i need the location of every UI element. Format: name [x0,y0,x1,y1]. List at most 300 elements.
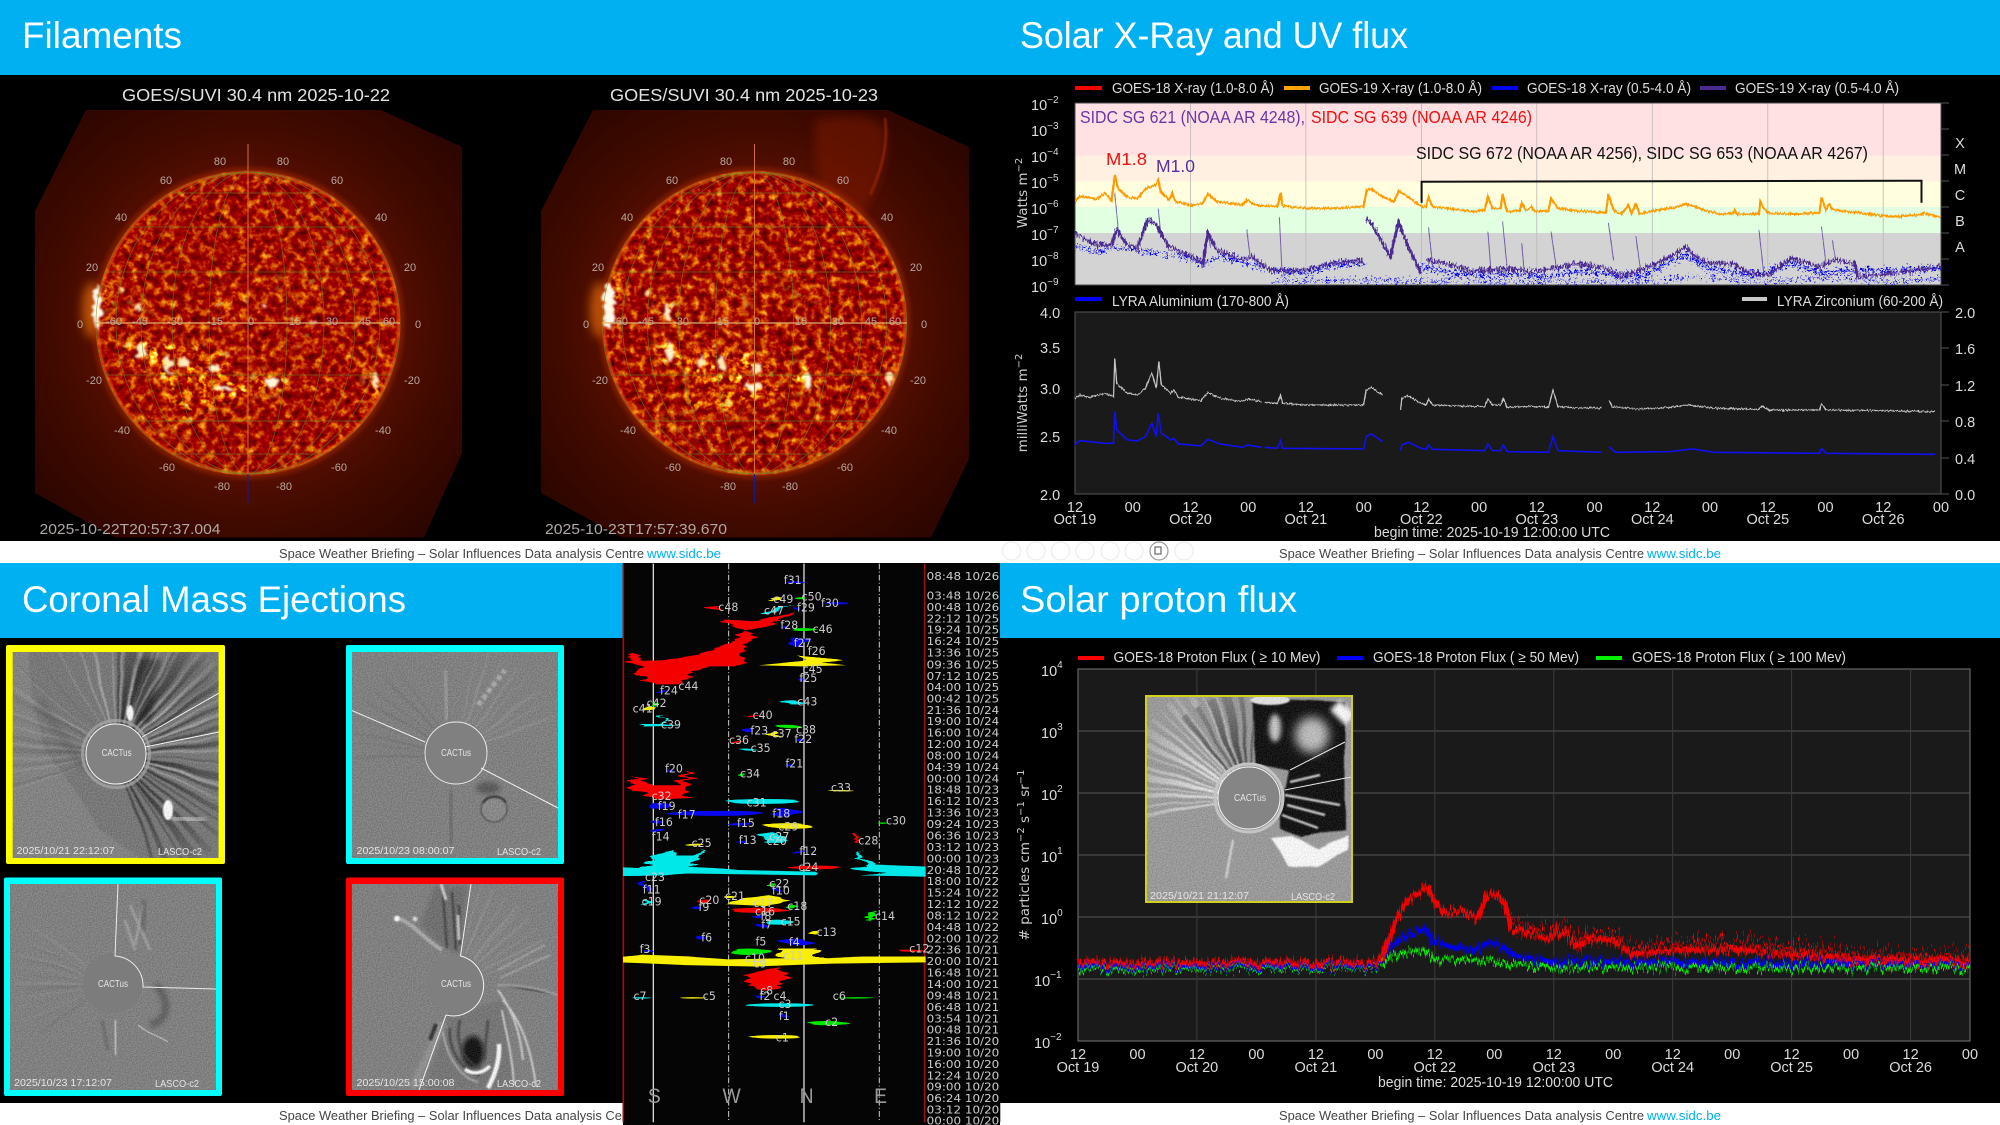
solar image: 2025-10-23: 20 [910,262,922,274]
detection labels: c48 [718,599,738,614]
solar image: 2025-10-23: -80 [720,481,736,493]
y-axis labels: proton: 10 [1041,726,1057,742]
solar image: 2025-10-23: -40 [620,425,636,437]
y-axis labels: proton: 4 [1057,660,1063,671]
solar image: 2025-10-23: 80 [783,156,795,168]
xray panel background [1000,0,2000,541]
solar image: 2025-10-23: 0 [921,319,927,331]
legend: LYRA zirconium: LYRA Zirconium (60-200 Å) [1777,293,1943,310]
y-axis labels: proton: 10 [1041,912,1057,928]
solar image: 2025-10-22: 60 [331,175,343,187]
footer: x-ray: www.sidc.be [1646,546,1721,561]
y-axis labels: LYRA right: 2.0 [1955,306,1975,322]
detection labels: f29 [797,600,815,615]
detection labels: c2 [825,1015,838,1029]
detection labels: f12 [799,844,817,858]
y-axis labels: proton: 10 [1041,788,1057,804]
detection labels: f16 [655,815,673,829]
time axis labels: 06:24 10/20 [927,1093,999,1105]
detection labels: f30 [821,596,839,610]
x-axis labels: LYRA: Oct 20 [1169,512,1212,528]
time axis labels: 06:48 10/21 [927,1002,999,1014]
annotation: M1.8: M1.8 [1106,149,1147,169]
y-axis labels: proton [1034,660,1063,1052]
y-axis labels: x-ray: −6 [1047,199,1059,210]
detection labels: c15 [781,914,801,929]
detection labels [633,572,929,1045]
x-axis labels: LYRA: 12 [1413,500,1429,516]
legend: x-ray: GOES-18 X-ray (0.5-4.0 Å) [1527,80,1691,97]
solar image: 2025-10-22: -40 [375,425,391,437]
detection labels: f13 [739,833,757,847]
x-axis labels: LYRA: Oct 21 [1285,512,1327,528]
y-axis labels: x-ray: 10 [1031,202,1047,218]
detection labels: c40 [753,708,773,722]
solar image: 2025-10-23: 60 [666,175,678,187]
x-axis labels: LYRA [1054,500,1949,541]
time axis labels: 09:24 10/23 [927,819,999,831]
footer: proton: Space Weather Briefing – Solar Influences Data analysis Centre [1279,1108,1644,1123]
detection labels: f22 [794,732,812,746]
CME image: yellow frame 2025/10/21 22:12: 2025/10/21 22:12:07 [17,845,115,857]
detection labels: c17 [753,896,773,910]
legend: x-ray: GOES-19 X-ray (0.5-4.0 Å) [1735,80,1899,97]
time axis labels: 12:12 10/22 [927,899,999,911]
x-axis labels: proton: 00 [1724,1047,1740,1063]
CME image: cyan frame 2025/10/23 17:12: LASCO-c2 [155,1078,199,1090]
solar image: 2025-10-22: 20 [404,262,416,274]
flare class letters [1954,136,1966,256]
y-axis labels: LYRA right [1955,306,1975,504]
y-axis labels: LYRA left: 4.0 [1040,306,1060,322]
y-axis labels: LYRA right: 1.6 [1955,342,1975,358]
solar image: 2025-10-23 [541,110,969,538]
x-axis labels: proton: 00 [1248,1047,1264,1063]
detection labels: f1 [779,1008,790,1023]
flare class letters: A [1955,240,1965,256]
detection labels: c14 [875,909,895,923]
x-axis labels: proton: 00 [1962,1047,1978,1063]
time axis labels: 16:48 10/21 [927,967,999,979]
detection labels: c13 [817,924,837,939]
footer: filaments: www.sidc.be [646,546,721,561]
detection labels: f26 [808,643,826,658]
time axis labels [927,571,1000,1125]
detection labels: c36 [729,733,749,747]
image title: 2025-10-22: GOES/SUVI 30.4 nm 2025-10-22 [122,85,390,105]
solar image: 2025-10-22: -15 [207,316,223,328]
detection labels: f8 [761,909,771,923]
detection labels: c6 [833,989,846,1003]
detection labels: c19 [642,894,662,909]
time axis labels: 13:36 10/23 [927,807,999,820]
x-axis labels: proton: Oct 23 [1532,1060,1575,1076]
x-axis labels: proton: 12 [1427,1047,1443,1063]
detection labels: f19 [658,799,676,813]
solar image: 2025-10-22: 80 [277,156,289,168]
time axis labels: 21:36 10/24 [927,705,1000,717]
solar image: 2025-10-22: 0 [415,319,421,331]
slideshow controls [1002,542,1193,560]
legend: x-ray [1075,80,1899,97]
detection labels: c39 [661,717,681,732]
inset: CME image 2025/10/21 21:12: 2025/10/21 21:12:07 [1150,890,1249,902]
time axis labels: 08:12 10/22 [927,910,999,923]
detection labels: c41 [633,701,653,716]
y-axis labels: LYRA left: 2.5 [1040,430,1060,446]
solar image: 2025-10-22: -60 [106,316,122,328]
CME image: yellow frame 2025/10/21 22:12: CACTus [102,747,132,759]
detection labels: f9 [699,900,709,914]
header: filaments [0,0,1000,75]
detection labels: f18 [772,806,790,820]
x-axis labels: proton: Oct 21 [1295,1060,1337,1076]
x-axis labels: LYRA: begin time: 2025-10-19 12:00:00 UTC [1374,525,1610,541]
CME image: cyan frame 2025/10/23 08:00: LASCO-c2 [497,846,541,858]
solar image: 2025-10-23: -40 [881,425,897,437]
detection labels: c7 [633,989,647,1003]
CME image: red frame 2025/10/25 15:00: CACTus [441,978,471,990]
flare class letters: X [1955,136,1965,152]
solar image: 2025-10-22: -60 [159,462,175,474]
y-axis labels: x-ray: −4 [1047,147,1059,158]
y-axis labels: LYRA left: 2.0 [1040,488,1060,504]
flare class letters: C [1955,188,1965,204]
annotation: SIDC SG 672: SIDC SG 672 (NOAA AR 4256), SIDC SG 653 (NOAA AR 4267) [1416,143,1868,163]
header: solar x-ray: Solar X-Ray and UV flux [1020,15,1408,56]
detection labels: f20 [665,761,683,775]
inset: CME image 2025/10/21 21:12 [1145,695,1353,903]
time axis labels: 09:48 10/21 [927,990,999,1002]
detection labels: c45 [803,662,823,676]
series: proton >=10 MeV [1078,887,1970,963]
footer: proton: www.sidc.be [1646,1108,1721,1123]
solar image: 2025-10-22: 40 [115,212,127,224]
detection labels: c49 [773,591,793,606]
detection labels: f10 [772,883,790,898]
series: proton >=50 MeV [1078,928,1970,966]
time axis labels: 22:12 10/25 [927,613,999,625]
y-axis labels: x-ray: −8 [1047,251,1059,262]
solar image: 2025-10-22: 0 [248,316,254,328]
detection labels: f24 [660,683,678,698]
y-axis labels: x-ray: −3 [1047,121,1059,132]
solar image: 2025-10-23: -60 [612,316,628,328]
solar image: 2025-10-23: 30 [832,316,844,328]
time axis labels: 06:36 10/23 [927,830,999,843]
x-axis labels: LYRA: 12 [1760,500,1776,516]
strip background [623,563,1000,1125]
solar image: 2025-10-23: 60 [889,316,901,328]
detection labels: c29 [778,819,798,834]
y-axis title: milliwatts: milliWatts m [1015,368,1031,452]
timestamp right: 2025-10-23T17:57:39.670 [545,521,727,538]
flare class letters: M [1954,162,1966,178]
CME image: red frame 2025/10/25 15:00 [346,878,564,1096]
solar image: 2025-10-22: 60 [160,175,172,187]
y-axis labels: x-ray: 10 [1031,254,1047,270]
inset: CME image 2025/10/21 21:12: CACTus [1234,792,1266,804]
y-axis title: particles: −2 [1016,827,1027,842]
detection labels: f23 [750,723,768,738]
time axis labels: 03:12 10/20 [927,1104,999,1117]
detection labels: f2 [760,989,770,1003]
detection labels: c30 [886,813,906,828]
panel: filaments [0,0,1000,541]
y-axis labels: proton: −1 [1050,970,1062,981]
legend: proton flux: GOES-18 Proton Flux ( ≥ 10 Mev) [1114,650,1320,666]
CME image: cyan frame 2025/10/23 17:12: CACTus [98,978,128,990]
annotation: M1.0: M1.0 [1156,156,1195,176]
detection labels: c3 [778,997,792,1011]
x-axis labels: LYRA: 00 [1587,500,1603,516]
header: filaments: Filaments [22,15,182,56]
y-axis labels: proton: −2 [1050,1032,1062,1043]
detection labels: f7 [761,917,772,932]
time axis labels: 16:00 10/24 [927,727,1000,740]
annotation: SIDC SG 639: SIDC SG 639 (NOAA AR 4246) [1311,107,1532,127]
x-axis labels: LYRA: Oct 22 [1400,512,1443,528]
x-axis labels: proton [1057,1047,1978,1091]
header: solar proton flux [1000,563,2000,638]
x-axis labels: proton: 12 [1070,1047,1086,1063]
CME image: yellow frame 2025/10/21 22:12: LASCO-c2 [158,846,202,858]
strip position lines [623,564,925,1122]
x-axis labels: LYRA: 12 [1875,500,1891,516]
compass labels: E [874,1085,887,1108]
detection labels: c22 [769,876,789,891]
detection labels: c4 [773,989,787,1003]
solar image: 2025-10-22 [35,110,462,538]
time axis labels: 08:00 10/24 [927,750,1000,763]
solar image: 2025-10-22: -80 [276,481,292,493]
x-axis labels: LYRA: 00 [1356,500,1372,516]
x-axis labels: proton: 00 [1486,1047,1502,1063]
solar image: 2025-10-23: -60 [837,462,853,474]
header: coronal mass ejections: Coronal Mass Ejections [22,579,406,620]
solar image: 2025-10-23: 15 [795,316,807,328]
time axis labels: 19:24 10/25 [927,624,999,637]
time axis background [926,564,1000,1122]
compass labels: W [723,1085,741,1108]
solar image: 2025-10-23: -80 [782,481,798,493]
footer: filaments: Space Weather Briefing – Solar Influences Data analysis Centre [279,546,644,561]
y-axis labels: x-ray: −9 [1047,277,1059,288]
y-axis labels: x-ray: 10 [1031,150,1047,166]
solar image: 2025-10-23: 45 [865,316,877,328]
time axis labels: 14:00 10/21 [927,978,999,991]
time axis labels: 16:12 10/23 [927,796,999,808]
y-axis labels: LYRA left [1040,306,1060,504]
detection labels: c42 [647,696,667,710]
series: GOES x-ray 0.5-4.0 [1075,175,1941,282]
solar image: 2025-10-22: 0 [77,319,83,331]
x-axis labels: LYRA: 00 [1471,500,1487,516]
x-axis labels: LYRA: 12 [1298,500,1314,516]
detection labels: c16 [755,904,775,918]
compass labels: S [648,1085,661,1108]
time axis labels: 00:48 10/26 [927,601,999,614]
x-axis labels: proton: Oct 22 [1413,1060,1456,1076]
solar image: 2025-10-23: -20 [592,375,608,387]
time axis labels: 04:39 10/24 [927,762,1000,774]
detection labels: c33 [831,780,851,795]
y-axis title: particles: −1 [1016,770,1027,784]
solar image: 2025-10-23: -30 [673,316,689,328]
compass labels: N [800,1085,814,1108]
solar image: 2025-10-23: 80 [720,156,732,168]
solar image: 2025-10-23: -20 [910,375,926,387]
x-axis labels: LYRA: Oct 24 [1631,512,1674,528]
detection labels: c21 [725,889,745,903]
chart: CACTus detection strip [610,563,1000,1125]
CME image: cyan frame 2025/10/23 08:00: CACTus [441,747,471,759]
panel: solar proton flux [1000,563,2000,1103]
legend: x-ray: GOES-19 X-ray (1.0-8.0 Å) [1319,80,1482,97]
y-axis labels: proton: 10 [1041,850,1057,866]
x-axis labels: proton: begin time: 2025-10-19 12:00:00 UTC [1378,1075,1613,1091]
solar image: 2025-10-22: 60 [383,316,395,328]
CME image: cyan frame 2025/10/23 08:00: 2025/10/23 08:00:07 [356,845,455,857]
time axis labels: 00:42 10/25 [927,693,999,705]
detection labels: c35 [751,741,771,755]
detection labels: c5 [703,989,716,1003]
CME image: cyan frame 2025/10/23 17:12: 2025/10/23 17:12:07 [14,1077,112,1089]
time axis labels: 18:48 10/23 [927,784,999,797]
x-axis labels: proton: 12 [1189,1047,1205,1063]
x-axis labels: LYRA: 00 [1817,500,1834,516]
time axis labels: 03:12 10/23 [927,842,999,854]
inset: CME image 2025/10/21 21:12: LASCO-c2 [1291,891,1335,903]
detection labels: c1 [776,1030,789,1045]
header: solar x-ray [1000,0,2000,75]
y-axis labels: proton: 10 [1041,664,1057,680]
x-axis labels: proton: Oct 25 [1770,1060,1813,1076]
solar image: 2025-10-23: 0 [754,316,760,328]
detection labels: f27 [794,635,812,650]
detection labels: f31 [784,572,802,587]
proton panel background [1000,563,2000,1103]
legend: x-ray: GOES-18 X-ray (1.0-8.0 Å) [1112,80,1274,97]
y-axis title: particles: # particles cm [1017,842,1033,940]
timestamp left: 2025-10-22T20:57:37.004 [40,521,220,538]
detection labels: f3 [640,942,650,956]
detection labels: c20 [699,892,719,907]
y-axis labels: x-ray: 10 [1031,98,1047,114]
x-axis labels: proton: 00 [1129,1047,1146,1063]
solar image: 2025-10-22: 20 [86,262,98,274]
detection labels: c9 [753,956,767,971]
x-axis labels: proton: 00 [1843,1047,1859,1063]
solar image: 2025-10-22: -20 [404,375,420,387]
filaments background [0,0,1000,541]
CME image: red frame 2025/10/25 15:00: 2025/10/25 15:00:08 [356,1077,455,1089]
detections [610,581,937,1039]
y-axis title: milliwatts: −2 [1014,354,1025,368]
solar image: 2025-10-23: -60 [665,462,681,474]
time axis labels: 21:36 10/20 [927,1036,999,1048]
solar image: 2025-10-23: 60 [837,175,849,187]
chart: LYRA [1075,312,1949,494]
detection labels: c11 [783,948,803,963]
solar image: 2025-10-22: -60 [331,462,347,474]
chart: proton flux [1078,669,1970,1041]
time axis labels: 16:24 10/25 [927,636,999,648]
y-axis title: watts: −2 [1014,158,1025,172]
solar image: 2025-10-22: -20 [86,375,102,387]
y-axis title: particles: s [1017,816,1033,827]
solar image: 2025-10-23: -15 [713,316,729,328]
time axis labels: 03:48 10/26 [927,590,999,602]
solar image: 2025-10-22: 45 [359,316,371,328]
y-axis labels: LYRA left: 3.5 [1040,341,1060,357]
y-axis labels: x-ray: −7 [1047,225,1059,236]
y-axis labels: x-ray [1031,95,1059,296]
solar image: 2025-10-22: -40 [114,425,130,437]
x-axis labels: LYRA: 00 [1702,500,1718,516]
x-axis labels: LYRA: 12 [1182,500,1199,516]
x-axis labels: LYRA: Oct 19 [1054,512,1096,528]
legend: proton flux: GOES-18 Proton Flux ( ≥ 50 Mev) [1373,650,1579,666]
detection labels: c27 [769,829,789,844]
time axis labels: 15:24 10/22 [927,887,999,900]
x-axis labels: proton: 12 [1665,1047,1681,1063]
detection labels: f25 [799,670,817,685]
series: aluminium [1075,412,1935,454]
y-axis labels: LYRA right: 1.2 [1955,379,1975,395]
solar image: 2025-10-23: 0 [583,319,589,331]
time axis labels: 16:00 10/20 [927,1058,999,1071]
time axis labels: 04:00 10/25 [927,682,999,694]
time axis labels: 22:36 10/21 [927,944,999,957]
solar image: 2025-10-23: 20 [592,262,604,274]
y-axis labels: x-ray: 10 [1031,228,1047,244]
time axis labels: 08:48 10/26 [927,571,999,583]
solar image: 2025-10-23: 40 [881,212,893,224]
chart: x-ray flux [1014,95,1975,541]
solar image: 2025-10-23: 40 [621,212,633,224]
y-axis labels: proton: 2 [1057,784,1063,795]
detection labels: c31 [747,795,767,810]
time axis labels: 20:48 10/22 [927,865,999,877]
detection labels: f4 [789,935,800,949]
x-axis labels: proton: 00 [1605,1047,1621,1063]
legend: proton flux: GOES-18 Proton Flux ( ≥ 100 Mev) [1632,650,1846,666]
header: coronal mass ejections [0,563,623,638]
x-axis labels: LYRA: Oct 23 [1515,512,1558,528]
solar image: 2025-10-22: -30 [167,316,183,328]
x-axis labels: proton: Oct 26 [1889,1060,1932,1076]
detection labels: c43 [797,694,817,709]
time axis labels: 12:00 10/24 [927,739,1000,751]
x-axis labels: LYRA: 12 [1644,500,1660,516]
x-axis labels: proton: 12 [1546,1047,1562,1063]
y-axis labels: proton: 1 [1057,846,1063,857]
bracket annotation [1422,181,1922,203]
x-axis labels: LYRA: 12 [1529,500,1545,516]
y-axis labels: proton: 10 [1034,1036,1050,1052]
CME image: cyan frame 2025/10/23 08:00 [346,645,564,864]
detection labels: c46 [813,622,833,636]
detection labels: c32 [652,789,672,803]
y-axis labels: x-ray: −5 [1047,173,1059,184]
time axis labels: 00:00 10/23 [927,853,999,865]
detection labels: c24 [798,860,818,874]
y-axis title: watts: Watts m [1015,172,1031,228]
x-axis labels: proton: Oct 20 [1176,1060,1218,1076]
y-axis labels: x-ray: 10 [1031,124,1047,140]
detection labels: c38 [796,722,816,736]
